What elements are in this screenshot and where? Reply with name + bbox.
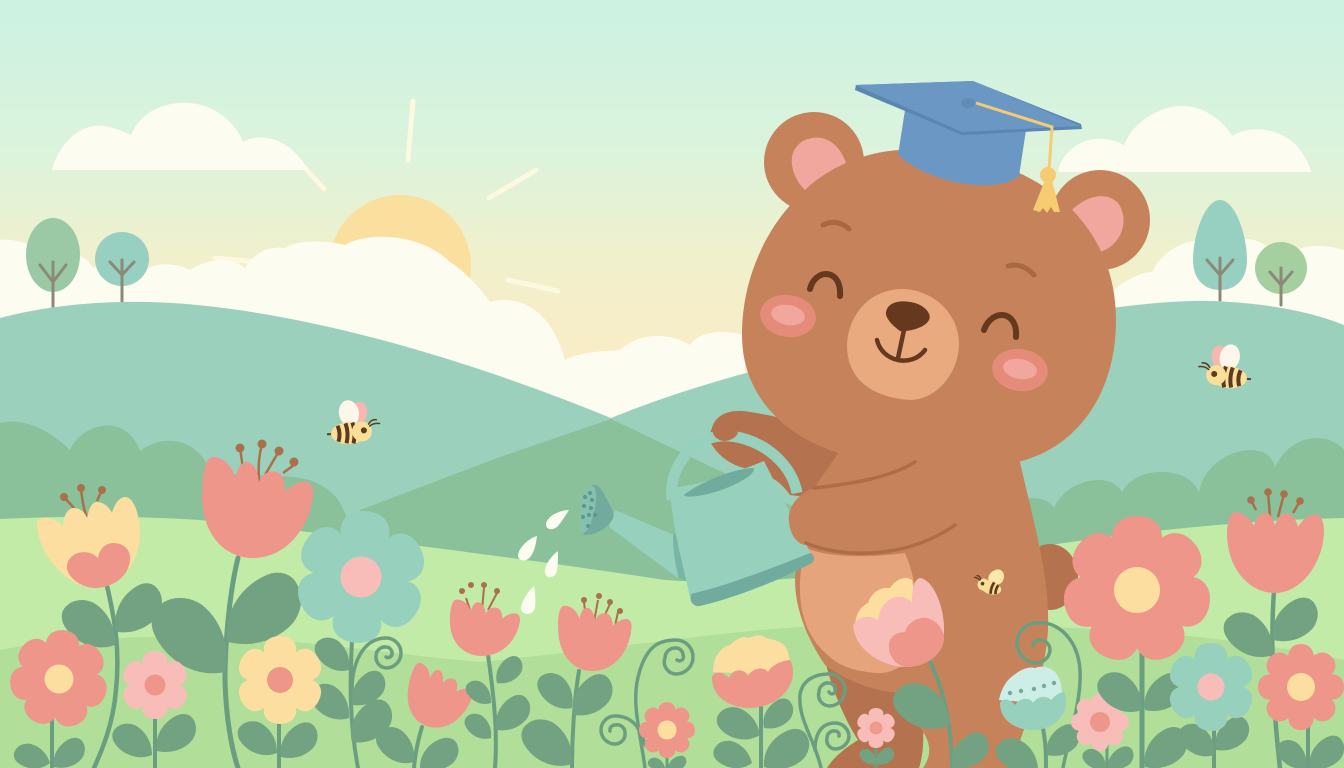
bushes: left bbox=[0, 421, 400, 600]
watering can bbox=[580, 436, 814, 606]
cap tassel bbox=[976, 103, 1060, 213]
bear hand on handle bbox=[712, 422, 738, 441]
curls: mid meadow bbox=[601, 640, 693, 768]
flowers in front of bear bbox=[800, 488, 1344, 768]
flower: big salmon daisy bbox=[1059, 516, 1215, 768]
cloud: top left bbox=[52, 103, 308, 170]
bee: right bbox=[1197, 340, 1254, 390]
flower: teal cup bud with curl bbox=[991, 623, 1086, 768]
can body bbox=[670, 461, 814, 603]
flower: mini salmon daisy bbox=[639, 702, 695, 768]
curls over bear leg bbox=[800, 674, 849, 768]
cloud band: left bbox=[0, 237, 745, 420]
bear eyes bbox=[810, 274, 1016, 337]
bear ears bbox=[764, 112, 1150, 270]
bear head bbox=[742, 150, 1116, 468]
hill: central mountain bbox=[300, 419, 860, 620]
bear belly bbox=[800, 548, 918, 673]
flower: right salmon tulip bbox=[1217, 488, 1326, 768]
flower: small tilted tulip bbox=[370, 662, 477, 768]
flower: teal daisy with curl bbox=[286, 505, 436, 768]
flower: yellow daisy bbox=[232, 636, 326, 768]
flower: mini pink daisy bbox=[855, 708, 898, 768]
left flowers and stems bbox=[2, 440, 817, 768]
bear muzzle bbox=[847, 289, 959, 400]
bear tail bbox=[1022, 544, 1078, 610]
trees: left bbox=[26, 218, 149, 307]
flower: salmon tulip one bbox=[450, 582, 537, 768]
cloud: top right bbox=[1058, 106, 1311, 172]
cloud band: right bbox=[1100, 239, 1344, 330]
bee: small on bear bbox=[971, 563, 1007, 597]
flower: teal daisy right bbox=[1165, 643, 1257, 768]
bear cheeks bbox=[757, 291, 1051, 395]
flower: pink daisy right bbox=[1071, 693, 1138, 768]
flower: salmon daisy right bbox=[1258, 644, 1344, 768]
can opening bbox=[684, 468, 754, 497]
water drops bbox=[518, 510, 569, 614]
meadow: front bbox=[0, 623, 1344, 768]
can handle bbox=[672, 436, 797, 500]
flower: yellow and salmon cup tulip bbox=[710, 635, 817, 768]
bear brows bbox=[823, 222, 1034, 275]
flower: salmon tulip two bbox=[514, 593, 634, 768]
flower: salmon daisy bbox=[2, 625, 115, 768]
flower: yellow tulip with stem and leaves bbox=[37, 484, 171, 768]
can rose head bbox=[580, 485, 614, 535]
bear body bbox=[795, 420, 1048, 768]
flower: pink tulip on bear bbox=[853, 578, 996, 768]
can bottom band bbox=[691, 553, 814, 606]
flower: big salmon tulip with stem and leaves bbox=[140, 440, 315, 768]
flower: small pink daisy bbox=[107, 651, 204, 768]
graduation cap bbox=[855, 81, 1082, 213]
meadow: back bbox=[0, 517, 1344, 768]
can spout bbox=[609, 510, 678, 578]
bear back leg bbox=[825, 660, 923, 768]
bee: left bbox=[325, 397, 381, 445]
bear back arm bbox=[710, 411, 846, 500]
trees: right bbox=[1193, 200, 1307, 305]
sun bbox=[329, 195, 471, 337]
sun rays bbox=[215, 101, 558, 291]
bushes: right bbox=[1020, 438, 1344, 600]
bear front arm bbox=[789, 462, 955, 553]
bear nose and mouth bbox=[877, 301, 930, 361]
hills: teal bbox=[0, 301, 1344, 768]
bear bbox=[580, 81, 1150, 768]
